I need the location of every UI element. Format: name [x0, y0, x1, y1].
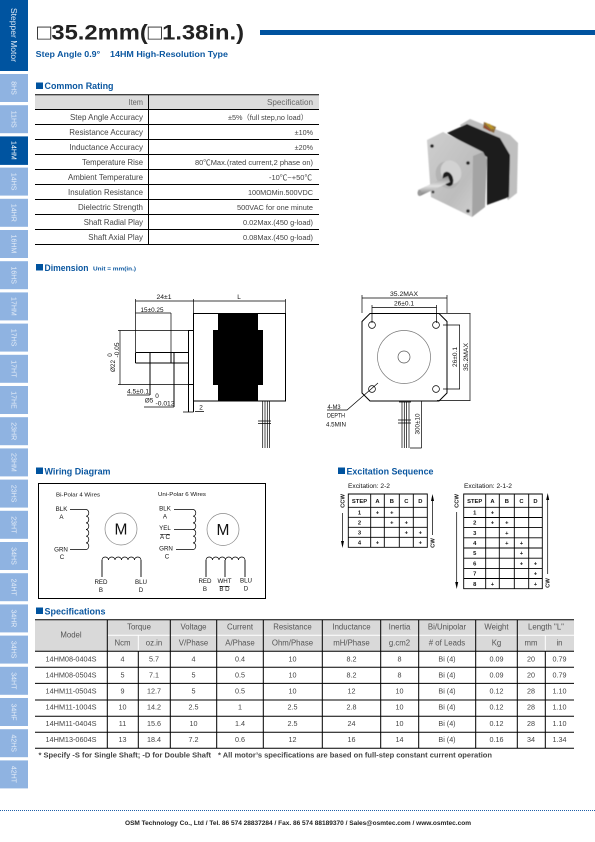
- table: excitation 2-1-2: +: [491, 521, 495, 527]
- spec row 5: 10: [190, 719, 198, 728]
- table: excitation 2-1-2: 4: [473, 541, 477, 547]
- table: common rating: 80℃Max.(rated current,2 phase on): [195, 158, 313, 167]
- table: common rating: Ambient Temperature: [68, 173, 143, 182]
- table: specifications: [35, 620, 574, 748]
- uni-polar diagram: [158, 492, 252, 593]
- tab: 34HR: 34HR: [10, 609, 16, 627]
- spec row 6: 34: [527, 735, 535, 744]
- table: excitation 2-2: Excitation: 2-2: [348, 484, 391, 490]
- uni-polar diagram: D: [244, 586, 249, 592]
- table: excitation 2-2: [340, 484, 436, 548]
- bi-polar diagram: RED: [94, 579, 108, 586]
- table: specifications: V/Phase: [179, 638, 208, 648]
- tab: 23HM: 23HM: [10, 453, 16, 472]
- table: specifications: Inertia: [389, 623, 411, 632]
- table: excitation 2-1-2: 1: [473, 510, 477, 516]
- spec row 1: 5.7: [149, 654, 159, 664]
- table: specifications: Model: [60, 630, 82, 640]
- spec row 5: 1.10: [552, 719, 566, 728]
- tab: 23HM: [0, 448, 28, 476]
- motor photo: [418, 119, 518, 217]
- table: excitation 2-1-2: D: [533, 499, 538, 505]
- spec row 3: 0.5: [235, 686, 245, 696]
- heading: Excitation Sequence: Excitation Sequence: [346, 466, 434, 476]
- pilot diameter tolerance label: [107, 342, 121, 358]
- spec row 2: 5: [192, 670, 196, 680]
- table: common rating: Shaft Axial Play: [88, 233, 144, 242]
- table: excitation 2-2: +: [405, 520, 409, 526]
- body length label L: L: [237, 294, 241, 301]
- spec row 4: 2.8: [346, 703, 356, 712]
- uni-polar diagram: A: [163, 514, 168, 520]
- spec row 1: 0.09: [490, 654, 504, 664]
- tab: 14HS: 14HS: [10, 173, 16, 191]
- table: excitation 2-1-2: +: [520, 561, 524, 567]
- spec row 4: 10: [118, 703, 126, 712]
- spec row 3: 0.12: [490, 686, 504, 696]
- tab: 42HS: 42HS: [10, 734, 16, 752]
- mounting hole callout: 4-M3: [328, 404, 341, 411]
- bi-polar diagram: M: [115, 522, 127, 538]
- spec row 5: 10: [396, 719, 404, 728]
- table: common rating: 100MΩMin.500VDC: [248, 188, 313, 197]
- table: specifications: Ohm/Phase: [272, 638, 313, 648]
- tab: 17HM: 17HM: [10, 297, 16, 316]
- table: excitation 2-1-2: A: [490, 499, 495, 505]
- shaft diameter label: 0: [155, 393, 159, 400]
- spec row 6: [46, 735, 566, 744]
- uni-polar diagram: YEL: [159, 525, 171, 532]
- footer contact line: OSM Technology Co., Ltd / Tel. 86 574 28837284 / Fax. 86 574 88189370 / Sales@osmtec.com / www.osmtec.com: [125, 820, 472, 827]
- tab: 17HE: [0, 386, 28, 414]
- uni-polar diagram: RED: [198, 578, 212, 585]
- spec row 5: Bi (4): [438, 719, 456, 728]
- spec row 2: 8: [398, 670, 402, 680]
- tab: 14HR: 14HR: [10, 204, 16, 222]
- table: excitation 2-1-2: 6: [473, 561, 477, 567]
- spec row 5: 14HM11-0404S: [46, 719, 97, 728]
- tab: 42HS: [0, 729, 28, 757]
- table: excitation 2-1-2: +: [491, 582, 495, 588]
- footer divider: [0, 810, 595, 812]
- spec row 4: 28: [527, 703, 535, 712]
- spec row 2: [46, 670, 566, 680]
- table: specifications: Voltage: [180, 623, 207, 632]
- table: specifications: Kg: [492, 638, 501, 648]
- table: common rating: ±5%（full step,no load）: [228, 113, 308, 122]
- spec row 5: 0.12: [490, 719, 504, 728]
- table: excitation 2-2: 4: [358, 540, 362, 546]
- spec row 6: 14HM13-0604S: [46, 735, 97, 744]
- spec row 6: 12: [288, 735, 296, 744]
- spec row 6: 1.34: [552, 735, 566, 744]
- bi-polar diagram: BLK: [56, 506, 68, 513]
- table: common rating: Specification: [267, 98, 313, 107]
- table: excitation 2-1-2: +: [534, 582, 538, 588]
- table: common rating: Resistance Accuracy: [69, 128, 144, 137]
- spec row 6: 14: [396, 735, 404, 744]
- table: excitation 2-1-2: +: [505, 521, 509, 527]
- table: excitation 2-2: +: [390, 510, 394, 516]
- spec row 4: 1: [238, 703, 242, 712]
- spec row 5: 11: [119, 719, 126, 728]
- spec row 2: 8.2: [346, 670, 356, 680]
- tab: 16HS: [0, 261, 28, 289]
- table: specifications: g.cm2: [389, 638, 410, 648]
- panel: wiring diagram: [38, 484, 266, 598]
- heading: Dimension: Unit = mm(in.): [93, 266, 136, 272]
- table: specifications: oz.in: [146, 638, 162, 648]
- spec row 6: 7.2: [188, 735, 198, 744]
- table: excitation 2-2: D: [418, 499, 422, 505]
- spec row 5: 28: [527, 719, 535, 728]
- table: excitation 2-2: +: [390, 520, 394, 526]
- bi-polar diagram: GRN: [54, 546, 68, 554]
- uni-polar diagram: C: [165, 554, 170, 560]
- table: excitation 2-1-2: +: [491, 510, 495, 516]
- spec row 1: 4: [120, 654, 124, 664]
- tab: 34HS second: 34HS: [10, 641, 16, 659]
- spec row 1: 8.2: [346, 654, 356, 664]
- tab: 34HT: [0, 667, 28, 695]
- tab: 16HM: 16HM: [10, 235, 16, 253]
- footnote: [38, 752, 492, 760]
- mounting hole callout: [326, 404, 346, 428]
- tab: 16HS: 16HS: [10, 266, 16, 284]
- table: specifications: mH/Phase: [333, 638, 370, 648]
- table: excitation 2-1-2: 7: [473, 572, 476, 578]
- tab: 34HF: 34HF: [10, 703, 16, 721]
- table: common rating: ±10%: [295, 128, 314, 137]
- table: excitation 2-1-2: 8: [473, 582, 477, 588]
- table: specifications: A/Phase: [225, 638, 255, 648]
- tab: 17HM: [0, 292, 28, 320]
- spec row 2: 7.1: [149, 670, 159, 680]
- bi-polar diagram: C: [60, 554, 65, 561]
- pilot height label: 2: [199, 404, 203, 412]
- tab: 17HS: 17HS: [10, 329, 16, 347]
- spec row 1: 10: [288, 654, 296, 664]
- table: specifications: Weight: [484, 623, 509, 632]
- table: excitation 2-2: A: [375, 499, 380, 505]
- tab: 14HR: [0, 199, 28, 227]
- sidebar navigation tabs: [0, 0, 28, 788]
- hole spacing label: 26±0.1: [394, 300, 414, 308]
- spec row 2: Bi (4): [438, 670, 456, 680]
- table: specifications: Inductance: [332, 623, 371, 632]
- spec row 6: 0.6: [235, 735, 245, 744]
- spec row 6: 18.4: [147, 735, 161, 744]
- arrow: CCW: CCW: [340, 494, 346, 508]
- table: specifications: # of Leads: [429, 638, 465, 648]
- tab: 34HS: [0, 542, 28, 570]
- spec row 3: 12.7: [147, 686, 161, 696]
- heading: Dimension: [36, 263, 136, 273]
- subtitle: Step Angle 0.9°: [36, 49, 101, 59]
- arrow: CW: CW: [546, 578, 552, 588]
- spec row 1: 4: [192, 654, 196, 664]
- shaft diameter label: -0.012: [156, 400, 175, 408]
- shaft diameter label: [145, 393, 175, 408]
- tab: Stepper Motor: [0, 0, 28, 71]
- pilot diameter tolerance label: 0: [107, 353, 114, 357]
- tab: 34HS: 34HS: [10, 547, 16, 565]
- width label: 35.2MAX: [390, 291, 419, 298]
- uni-polar diagram: M: [217, 522, 229, 539]
- spec row 1: Bi (4): [438, 654, 456, 664]
- tab: 34HF: [0, 698, 28, 726]
- tab: 11HS: 11HS: [10, 111, 16, 128]
- spec row 6: 16: [348, 735, 356, 744]
- tab: 14HM active: [0, 136, 28, 165]
- table: common rating: Temperature Rise: [82, 158, 143, 167]
- table: excitation 2-1-2: +: [534, 572, 538, 578]
- spec row 4: Bi (4): [438, 703, 456, 712]
- tab: 17HT: [0, 355, 28, 383]
- hole spacing vertical label: 26±0.1: [452, 347, 459, 367]
- spec row 6: Bi (4): [438, 735, 456, 744]
- tab: 23HR: [0, 417, 28, 445]
- tab: 17HE: 17HE: [10, 391, 16, 409]
- bi-polar diagram: B: [99, 587, 103, 594]
- table: excitation 2-1-2: C: [519, 499, 524, 505]
- spec row 6: 0.16: [490, 735, 504, 744]
- table: excitation 2-1-2: B: [505, 499, 509, 505]
- bi-polar diagram: [54, 492, 147, 594]
- table: specifications: Resistance: [273, 623, 312, 632]
- spec row 2: 10: [288, 670, 296, 680]
- spec row 3: 28: [527, 686, 535, 696]
- side view dimension drawing: [107, 294, 286, 448]
- tab: 23HR: 23HR: [10, 422, 16, 440]
- heading: Specifications: Specifications: [44, 606, 106, 616]
- tab: 42HT: [0, 760, 28, 788]
- uni-polar diagram: GRN: [159, 546, 173, 552]
- table: common rating: Dielectric Strength: [78, 203, 143, 212]
- arrow: CW: CW: [430, 538, 436, 548]
- table: common rating: 500VAC for one minute: [237, 203, 313, 212]
- uni-polar diagram: WHT: [217, 578, 232, 585]
- table: excitation 2-2: +: [405, 530, 409, 536]
- bi-polar diagram: BLU: [135, 579, 147, 586]
- table: excitation 2-2: STEP: [352, 499, 367, 505]
- table: excitation 2-2: +: [419, 530, 423, 536]
- table: common rating: Inductance Accuracy: [69, 143, 144, 152]
- table: excitation 2-1-2: STEP: [467, 499, 482, 505]
- uni-polar diagram: BLK: [159, 506, 172, 512]
- heading: Wiring Diagram: Wiring Diagram: [44, 466, 110, 476]
- table: excitation 2-2: +: [376, 510, 380, 516]
- title rule bar: [260, 30, 595, 35]
- table: excitation 2-1-2: +: [505, 531, 509, 537]
- table: excitation 2-2: 2: [358, 520, 361, 526]
- flat length label: 15±0.25: [140, 307, 164, 314]
- tab: 14HS: [0, 168, 28, 196]
- table: common rating: Item: [128, 98, 143, 107]
- uni-polar diagram: Uni-Polar 6 Wires: [158, 492, 206, 498]
- uni-polar diagram: BLU: [240, 578, 252, 584]
- front view dimension drawing: [326, 291, 470, 448]
- footnote: * All motor’s specifications are based on full-step constant current operation: [218, 752, 492, 760]
- spec row 4: 14HM11-1004S: [46, 703, 97, 712]
- mounting hole callout: 4.5MIN: [326, 422, 346, 428]
- table: excitation 2-2: C: [404, 499, 409, 505]
- spec row 1: 20: [527, 654, 535, 664]
- spec row 5: 24: [348, 719, 356, 728]
- spec row 4: 0.12: [490, 703, 504, 712]
- table: excitation 2-1-2: +: [520, 551, 524, 557]
- tab: 23HS: 23HS: [10, 485, 16, 503]
- table: specifications: in: [556, 638, 563, 648]
- table: excitation 2-1-2: 5: [473, 551, 477, 557]
- spec row 4: 1.10: [552, 703, 566, 712]
- spec row 5: 15.6: [147, 719, 161, 728]
- spec row 4: 10: [396, 703, 404, 712]
- spec row 1: 0.79: [552, 654, 566, 664]
- tab: 14HM active: 14HM: [10, 141, 16, 160]
- table: excitation 2-1-2: 3: [473, 531, 477, 537]
- motor leads: [258, 401, 271, 448]
- tab: 17HT: 17HT: [10, 360, 16, 378]
- bi-polar diagram: Bi-Polar 4 Wires: [56, 492, 100, 498]
- flat depth label: 4.5±0.1: [127, 388, 149, 396]
- table: specifications: Torque: [127, 623, 151, 632]
- title: □35.2mm( □1.38in.): [37, 20, 244, 44]
- spec row 5: 2.5: [288, 719, 298, 728]
- table: specifications: Length "L": [528, 623, 564, 632]
- table: excitation 2-1-2: [455, 484, 552, 589]
- spec row 3: 9: [120, 686, 124, 696]
- table: common rating: 0.02Max.(450 g-load): [243, 218, 313, 227]
- table: excitation 2-1-2: +: [520, 541, 524, 547]
- spec row 3: 5: [192, 686, 196, 696]
- spec row 3: [46, 686, 566, 696]
- pilot diameter tolerance label: -0.05: [114, 342, 121, 358]
- tab: 34HR: [0, 604, 28, 632]
- spec row 2: 14HM08-0504S: [46, 670, 97, 680]
- spec row 2: 0.5: [235, 670, 245, 680]
- heading: Common Rating: Common Rating: [44, 81, 114, 91]
- spec row 5: 1.4: [235, 719, 245, 728]
- table: specifications: Current: [227, 623, 254, 632]
- mounting hole callout: DEPTH: [327, 412, 345, 420]
- spec row 3: Bi (4): [438, 686, 456, 696]
- tab: 23HT: 23HT: [10, 516, 16, 534]
- subtitle: 14HM High-Resolution Type: [110, 49, 228, 59]
- spec row 1: [46, 654, 566, 664]
- spec row 4: 14.2: [147, 703, 161, 712]
- spec row 4: [46, 703, 566, 712]
- spec row 3: 1.10: [552, 686, 566, 696]
- tab: 16HM: [0, 230, 28, 258]
- table: excitation 2-1-2: +: [505, 541, 509, 547]
- tab: 24HT: [0, 573, 28, 601]
- bi-polar diagram: D: [139, 587, 144, 594]
- spec row 6: 13: [118, 735, 126, 744]
- tab: 8HS: [0, 74, 28, 102]
- table: excitation 2-1-2: 2: [473, 521, 476, 527]
- table: common rating: Insulation Resistance: [68, 188, 143, 197]
- spec row 2: 20: [527, 670, 535, 680]
- lead length label: 300±10: [414, 413, 422, 434]
- table: excitation 2-1-2: Excitation: 2-1-2: [464, 484, 513, 490]
- spec row 3: 12: [348, 686, 356, 696]
- arrow: CCW: CCW: [455, 494, 461, 508]
- tab: 42HT: 42HT: [10, 766, 16, 784]
- tab: 24HT: 24HT: [10, 579, 16, 596]
- uni-polar diagram: A C: [160, 534, 171, 541]
- table: common rating: Step Angle Accuracy: [70, 113, 144, 122]
- table: specifications: Bi/Unipolar: [428, 623, 466, 632]
- uni-polar diagram: B D: [219, 586, 230, 593]
- shaft length label 24: 24±1: [156, 294, 172, 301]
- table: common rating: -10℃~+50℃: [269, 173, 312, 182]
- uni-polar diagram: B: [203, 586, 207, 593]
- spec row 3: 10: [288, 686, 296, 696]
- spec row 3: 14HM11-0504S: [46, 686, 97, 696]
- table: excitation 2-2: B: [390, 499, 394, 505]
- spec row 3: 10: [396, 686, 404, 696]
- shaft diameter label: Ø5: [145, 398, 154, 404]
- table: common rating: [35, 95, 319, 244]
- spec row 1: 8: [398, 654, 402, 664]
- table: excitation 2-2: 1: [358, 510, 362, 516]
- tab: 23HS: [0, 480, 28, 508]
- table: excitation 2-2: +: [419, 540, 423, 546]
- table: excitation 2-2: +: [376, 540, 380, 546]
- diameter 22 label: Ø22: [110, 360, 117, 372]
- spec row 2: 0.09: [490, 670, 504, 680]
- bi-polar diagram: A: [59, 514, 64, 521]
- table: specifications: mm: [524, 638, 538, 648]
- table: common rating: 0.08Max.(450 g-load): [243, 233, 313, 242]
- spec row 1: 14HM08-0404S: [46, 654, 97, 664]
- footnote: * Specify -S for Single Shaft; -D for Double Shaft: [38, 752, 212, 760]
- tab: 23HT: [0, 511, 28, 539]
- spec row 4: 2.5: [188, 703, 198, 712]
- tab: 8HS: 8HS: [10, 81, 16, 95]
- subtitle: [36, 49, 228, 59]
- spec row 2: 0.79: [552, 670, 566, 680]
- heading: Dimension: Dimension: [44, 263, 88, 273]
- spec row 2: 5: [120, 670, 124, 680]
- spec row 1: 0.4: [235, 654, 245, 664]
- table: common rating: Shaft Radial Play: [84, 218, 144, 227]
- height label: 35.2MAX: [463, 342, 470, 371]
- tab: 34HT: 34HT: [10, 672, 16, 690]
- table: excitation 2-1-2: +: [534, 561, 538, 567]
- table: excitation 2-2: 3: [358, 530, 362, 536]
- tab: 17HS: [0, 324, 28, 352]
- table: common rating: ±20%: [295, 143, 314, 152]
- spec row 5: [46, 719, 566, 728]
- tab: 11HS: [0, 105, 28, 133]
- tab: 34HS second: [0, 636, 28, 664]
- table: specifications: Ncm: [114, 638, 131, 648]
- spec row 4: 2.5: [288, 703, 298, 712]
- tab: Stepper Motor: Stepper Motor: [9, 8, 19, 62]
